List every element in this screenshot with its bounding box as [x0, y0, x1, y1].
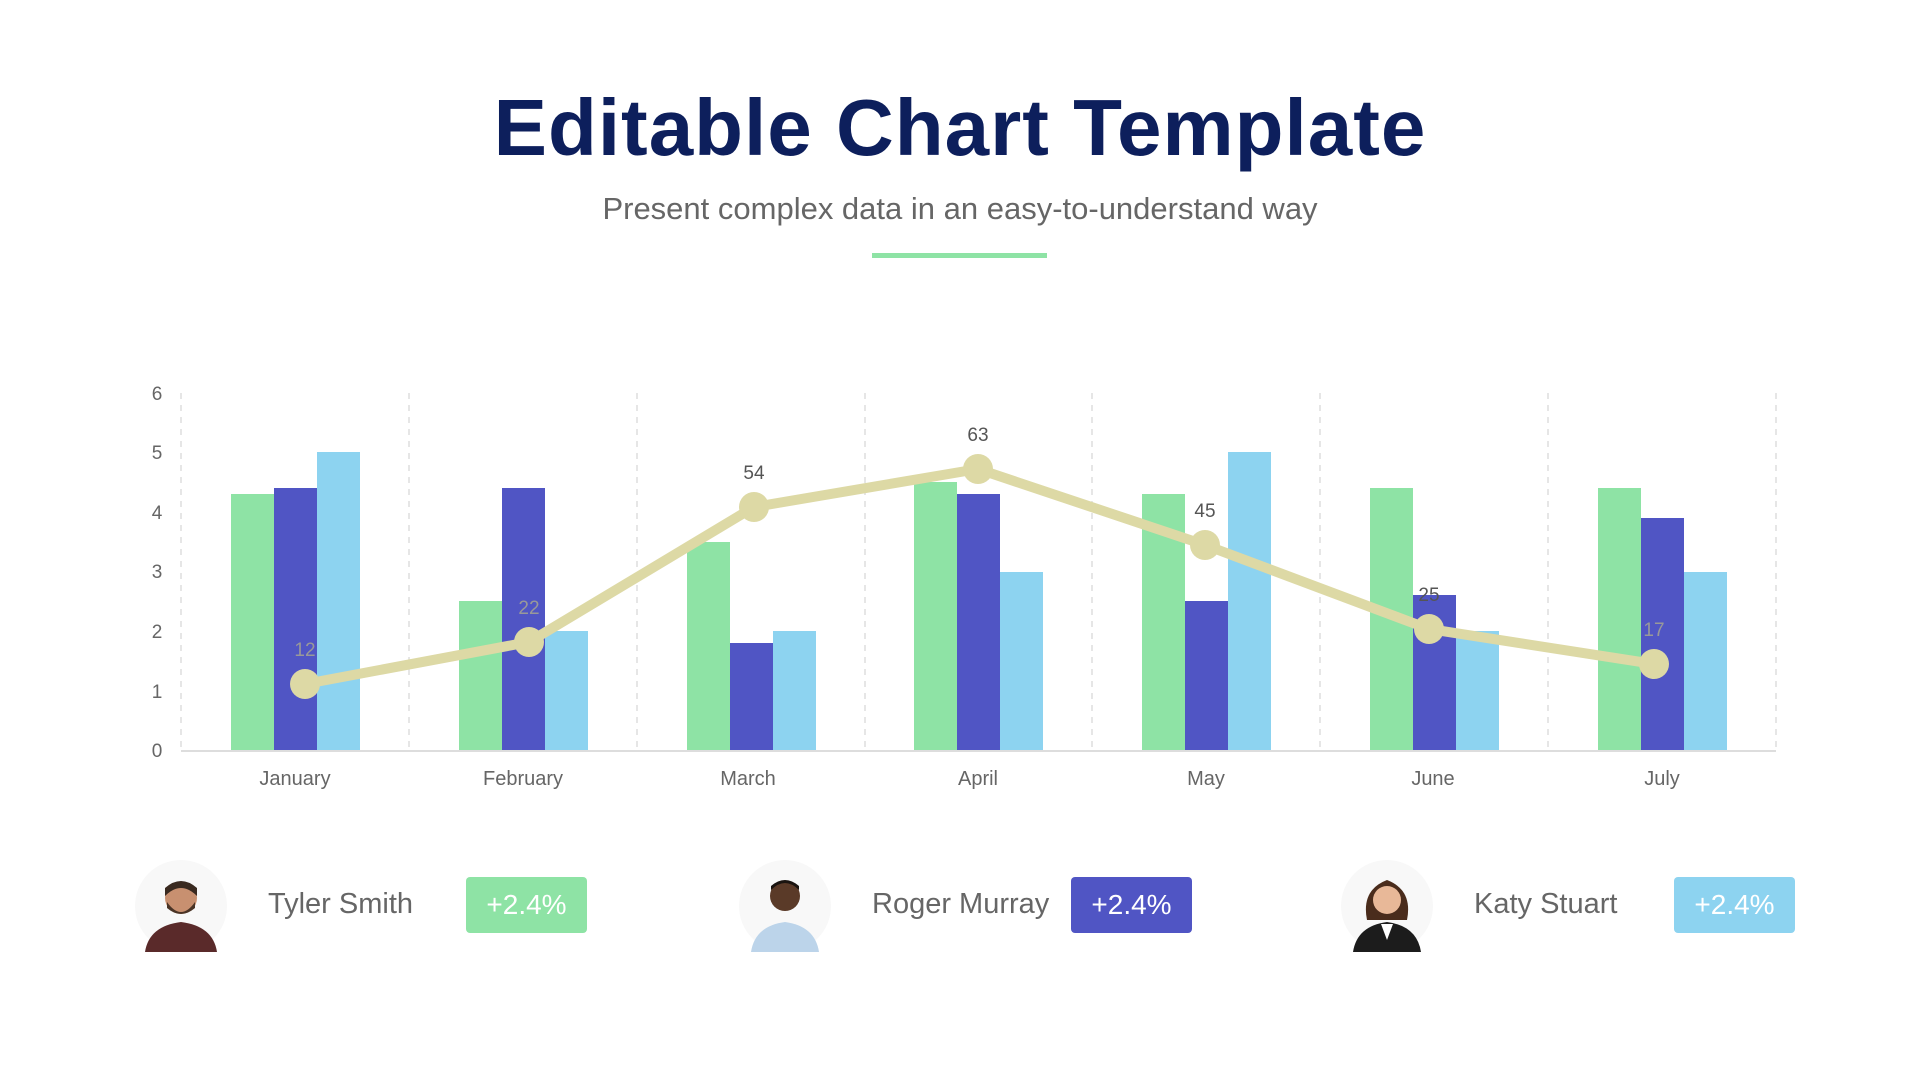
y axis labels: 4	[152, 503, 163, 524]
badge	[466, 877, 587, 933]
line series: 17	[1643, 620, 1665, 641]
bars	[231, 452, 1727, 750]
line series: 22	[518, 598, 540, 619]
y axis labels: 1	[152, 682, 162, 703]
chart	[152, 384, 1777, 790]
title: Editable Chart Template	[494, 83, 1426, 172]
x axis labels: March	[720, 768, 776, 790]
line series: 45	[1194, 501, 1216, 522]
name: Roger Murray	[872, 888, 1049, 920]
badge: +2.4%	[1694, 889, 1775, 920]
line series: 12	[294, 640, 316, 661]
x axis labels: May	[1187, 768, 1225, 790]
avatar: Roger	[751, 880, 819, 952]
y axis labels: 5	[152, 443, 162, 464]
line series: 25	[1418, 585, 1440, 606]
x axis labels: February	[483, 768, 563, 790]
line series: 54	[743, 463, 765, 484]
subtitle: Present complex data in an easy-to-understand way	[602, 191, 1318, 226]
badge	[1674, 877, 1795, 933]
avatar: Tyler	[145, 881, 217, 952]
x axis labels: July	[1644, 768, 1680, 790]
name: Katy Stuart	[1474, 888, 1617, 920]
line series	[290, 425, 1669, 699]
y axis labels: 6	[152, 384, 162, 405]
x axis labels	[259, 768, 1680, 790]
person: Roger Murray	[751, 877, 1192, 952]
avatar: Katy	[1353, 880, 1421, 952]
x axis labels: January	[259, 768, 331, 790]
accent underline	[872, 253, 1047, 258]
y axis labels	[152, 384, 163, 762]
y axis labels: 2	[152, 622, 162, 643]
x axis labels: April	[958, 768, 998, 790]
y axis labels: 3	[152, 562, 162, 583]
y axis labels: 0	[152, 741, 162, 762]
person: Tyler Smith	[145, 877, 587, 952]
badge: +2.4%	[486, 889, 567, 920]
x axis labels: June	[1411, 768, 1455, 790]
badge: +2.4%	[1091, 889, 1172, 920]
line series: 63	[967, 425, 989, 446]
name: Tyler Smith	[268, 888, 413, 920]
person: Katy Stuart	[1353, 877, 1795, 952]
badge	[1071, 877, 1192, 933]
